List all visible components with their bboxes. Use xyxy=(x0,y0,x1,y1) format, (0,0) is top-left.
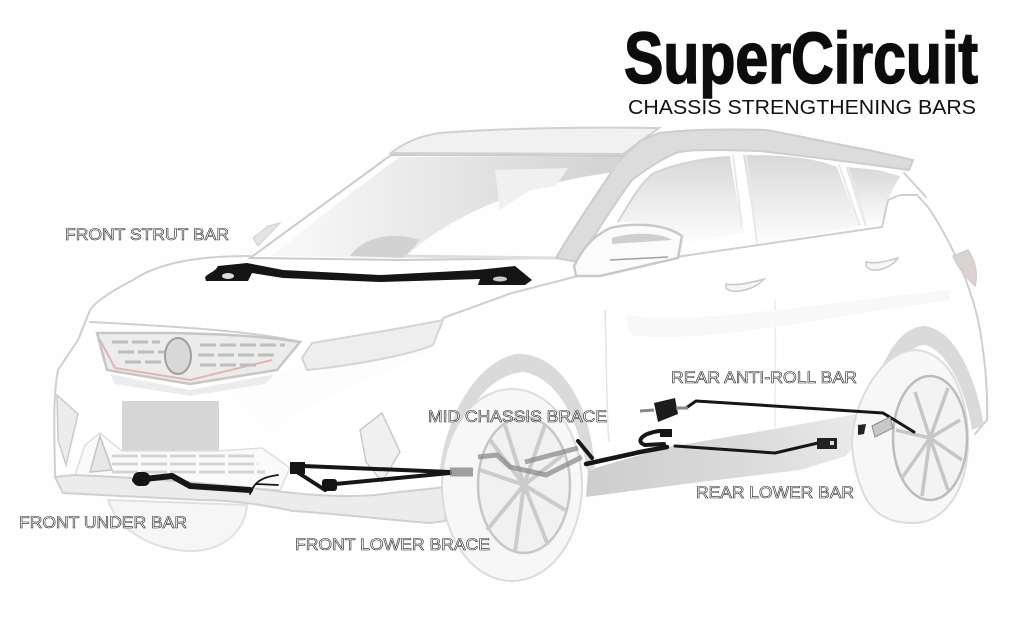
fog lamp left xyxy=(57,395,78,465)
front wheel arch xyxy=(440,354,595,470)
label: front strut bar: FRONT STRUT BAR xyxy=(65,225,229,244)
front lower brace xyxy=(290,462,473,491)
front under bar xyxy=(133,472,278,494)
label: mid chassis brace: MID CHASSIS BRACE xyxy=(428,407,607,426)
side windows xyxy=(618,155,900,245)
windscreen xyxy=(250,155,622,260)
far front wheel xyxy=(108,500,247,551)
door sill xyxy=(586,412,874,497)
rear anti-roll bar xyxy=(640,398,914,437)
mid chassis brace xyxy=(478,429,672,475)
rear lower bar xyxy=(675,438,837,453)
label: front under bar: FRONT UNDER BAR xyxy=(19,513,187,532)
fog lamp right xyxy=(360,413,400,482)
badge xyxy=(165,338,191,374)
body lines xyxy=(54,173,987,477)
subtitle: CHASSIS STRENGTHENING BARS xyxy=(628,96,976,119)
door handles xyxy=(726,258,898,291)
rear wheel xyxy=(852,350,968,523)
roof xyxy=(391,128,913,262)
front strut bar xyxy=(205,263,532,285)
car illustration xyxy=(54,127,987,581)
label: front lower brace: FRONT LOWER BRACE xyxy=(295,535,490,554)
licence plate xyxy=(122,401,219,451)
front wheel xyxy=(442,389,582,581)
grille xyxy=(97,333,300,396)
headlight xyxy=(302,320,443,370)
rear wheel arch xyxy=(872,326,984,430)
front bumper lip xyxy=(55,475,447,523)
car body xyxy=(54,127,987,490)
lower grille xyxy=(75,433,290,490)
label: rear anti-roll bar: REAR ANTI-ROLL BAR xyxy=(671,368,857,387)
tail light xyxy=(953,250,976,286)
label: rear lower bar: REAR LOWER BAR xyxy=(696,483,854,502)
mirror xyxy=(574,225,682,276)
